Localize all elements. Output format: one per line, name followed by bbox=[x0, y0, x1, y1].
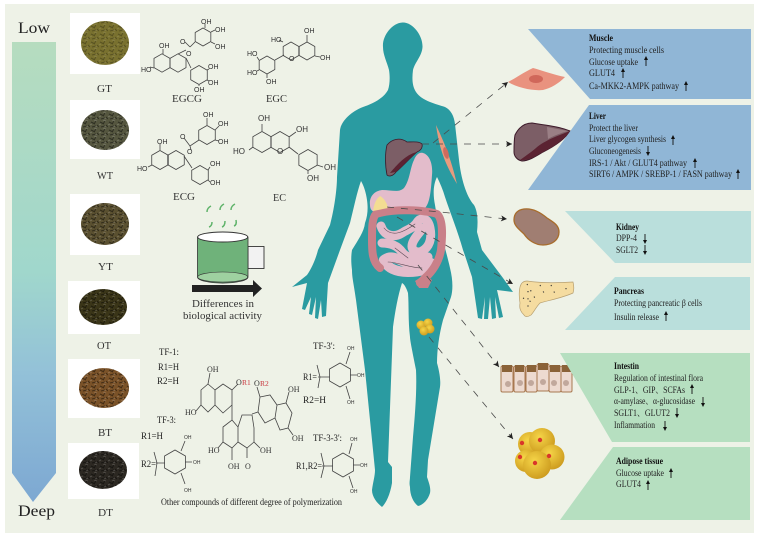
text and structure: TF-3': OH bbox=[347, 400, 355, 406]
icon: muscle cell bbox=[508, 68, 565, 90]
text and structure: TF-3': OH bbox=[357, 373, 365, 379]
molecule: EGC: HO bbox=[271, 37, 282, 44]
arrow: to adipose bbox=[429, 337, 513, 439]
panel: liver: IRS-1 / Akt / GLUT4 pathway bbox=[589, 158, 687, 168]
molecule: theaflavin core: HO bbox=[185, 408, 197, 417]
molecule: EC: OH bbox=[296, 125, 308, 134]
text and structure: TF-3-3': OH bbox=[350, 489, 358, 495]
panel: intestine: α-amylase、α-glucosidase bbox=[614, 396, 695, 406]
molecule: EGCG: O bbox=[186, 51, 192, 58]
tea sample: BT: BT bbox=[98, 428, 113, 439]
molecule: theaflavin core: R1 bbox=[242, 378, 251, 387]
icon: kidney bbox=[514, 209, 559, 245]
arrow: differences in biological activity bbox=[192, 280, 262, 297]
panel: muscle: Protecting muscle cells bbox=[589, 45, 664, 55]
molecule: EC: OH bbox=[307, 174, 319, 183]
text: differences in biological activity bbox=[183, 299, 263, 322]
molecule: EC: HO bbox=[233, 147, 245, 156]
text: polymerization caption: Other compounds of different degree of polymerization bbox=[161, 497, 342, 507]
panel: adipose tissue: Adipose tissue bbox=[616, 456, 663, 466]
panel: adipose tissue bbox=[560, 447, 750, 520]
panel: liver: SIRT6 / AMPK / SREBP-1 / FASN pathway bbox=[589, 169, 732, 179]
molecule: theaflavin core: OH bbox=[207, 365, 219, 374]
icon: adipose tissue bbox=[515, 428, 564, 479]
tea sample: DT: DT bbox=[98, 508, 114, 519]
panel: liver bbox=[528, 105, 751, 190]
molecule: ECG: OH bbox=[218, 121, 228, 128]
molecule: EGCG: OH bbox=[208, 80, 218, 87]
panel: intestine: Inflammation bbox=[614, 420, 655, 430]
text and structure: TF-3-3' bbox=[296, 433, 368, 495]
molecule: EC: OH bbox=[324, 163, 336, 172]
molecule: EGCG: HO bbox=[141, 67, 152, 74]
molecule: EGC bbox=[247, 28, 330, 105]
molecule: ECG: OH bbox=[203, 112, 214, 119]
molecule: EGC: O bbox=[289, 56, 295, 63]
icon: liver bbox=[514, 123, 570, 161]
panel: muscle: GLUT4 bbox=[589, 68, 615, 78]
panel: adipose tissue: Glucose uptake bbox=[616, 468, 664, 478]
text: differences in biological activity: Differences in bbox=[192, 299, 255, 310]
text: TF-1 bbox=[157, 347, 179, 386]
arrow: to muscle bbox=[433, 82, 508, 143]
organ: stomach bbox=[370, 153, 432, 214]
molecule: EGCG: EGCG bbox=[172, 94, 202, 105]
molecule: EC: O bbox=[277, 147, 283, 156]
arrow: to pancreas bbox=[397, 217, 513, 284]
molecule: EGC: HO bbox=[247, 70, 258, 77]
tea sample: GT bbox=[70, 13, 140, 95]
panel: muscle: Glucose uptake bbox=[589, 57, 638, 67]
tea sample: OT: OT bbox=[97, 341, 112, 352]
panel: kidney: DPP-4 bbox=[616, 233, 637, 243]
arrow: to intestine bbox=[418, 265, 499, 367]
tea samples column bbox=[68, 13, 140, 519]
text and structure: TF-3': R1= bbox=[303, 372, 317, 382]
tea sample: WT: WT bbox=[97, 171, 114, 182]
panel: intestine: Regulation of intestinal flora bbox=[614, 373, 703, 383]
molecule: theaflavin core: OH bbox=[292, 434, 304, 443]
molecule: theaflavin core: O bbox=[236, 378, 242, 387]
panel: pancreas: Pancreas bbox=[614, 286, 644, 296]
panel: kidney: SGLT2 bbox=[616, 245, 638, 255]
panel: pancreas: Insulin release bbox=[614, 312, 659, 322]
molecule: theaflavin core: HO bbox=[208, 446, 220, 455]
text and structure: TF-3-3': TF-3-3': bbox=[313, 433, 342, 443]
text and structure: TF-3: R2= bbox=[141, 459, 156, 469]
label: Deep: Deep bbox=[18, 503, 55, 520]
text: differences in biological activity: biological activity bbox=[183, 311, 263, 322]
organ: small intestine bbox=[381, 219, 431, 272]
panel: pancreas: Protecting pancreatic β cells bbox=[614, 298, 702, 308]
organ: small pancreas bbox=[373, 196, 388, 211]
panel: liver: Liver bbox=[589, 111, 606, 121]
text: TF-1: R2=H bbox=[157, 376, 179, 386]
molecule: EGCG bbox=[141, 19, 226, 105]
panel: adipose tissue: GLUT4 bbox=[616, 479, 641, 489]
molecule: EGCG: OH bbox=[159, 43, 170, 50]
molecule: ECG: O bbox=[180, 134, 186, 141]
text and structure: TF-3-3': OH bbox=[350, 437, 358, 443]
molecule: EGCG: O bbox=[180, 39, 186, 46]
icon: tea cup with steam bbox=[198, 204, 264, 283]
molecule: EGC: HO bbox=[247, 51, 258, 58]
molecule: theaflavin core: O bbox=[245, 462, 251, 471]
text: TF-1: R1=H bbox=[158, 362, 179, 372]
molecule: ECG: OH bbox=[157, 139, 168, 146]
panel: liver: Liver glycogen synthesis bbox=[589, 134, 666, 144]
tea sample: YT bbox=[70, 194, 140, 273]
text and structure: TF-3: OH bbox=[193, 460, 201, 466]
text and structure: TF-3: OH bbox=[184, 435, 192, 441]
molecule: theaflavin core: O bbox=[254, 379, 260, 388]
text and structure: TF-3': OH bbox=[347, 346, 355, 352]
tea sample: OT bbox=[68, 281, 140, 352]
molecule: EC: OH bbox=[258, 114, 270, 123]
molecule: EGC: OH bbox=[304, 28, 314, 35]
panel: muscle: Muscle bbox=[589, 33, 613, 43]
organ: small adipose bbox=[416, 318, 434, 336]
molecule: ECG: OH bbox=[210, 180, 220, 187]
text and structure: TF-3 bbox=[141, 415, 201, 494]
molecule: EGCG: OH bbox=[208, 64, 218, 71]
steam bbox=[207, 204, 236, 227]
panel: pancreas bbox=[565, 277, 750, 330]
panel: intestine: Intestin bbox=[614, 361, 639, 371]
molecule: EGCG: OH bbox=[201, 19, 212, 26]
text and structure: TF-3: R1=H bbox=[141, 431, 163, 441]
gradient arrow: fermentation degree bbox=[12, 20, 56, 520]
label: Low: Low bbox=[18, 20, 50, 37]
panel: muscle: Ca-MKK2-AMPK pathway bbox=[589, 81, 679, 91]
molecule: EGCG: OH bbox=[215, 44, 226, 51]
molecule: ECG: OH bbox=[210, 161, 220, 168]
molecule: theaflavin core: OH bbox=[228, 462, 240, 471]
text and structure: TF-3: OH bbox=[184, 488, 192, 494]
panel: liver: Protect the liver bbox=[589, 123, 638, 133]
text and structure: TF-3: TF-3: bbox=[157, 415, 176, 425]
panel: intestine bbox=[560, 353, 750, 442]
molecule: EC bbox=[233, 114, 336, 204]
molecule: EGCG: OH bbox=[194, 87, 204, 94]
molecule: EGCG: OH bbox=[215, 27, 226, 34]
panel: intestine: SGLT1、GLUT2 bbox=[614, 408, 670, 418]
organ: small liver bbox=[386, 139, 422, 176]
panel: liver: Gluconeogenesis bbox=[589, 146, 641, 156]
tea sample: GT: GT bbox=[97, 84, 113, 95]
tea sample: BT bbox=[68, 359, 140, 439]
organ: colon bbox=[372, 210, 442, 288]
molecule: EGC: OH bbox=[266, 79, 276, 86]
molecule: theaflavin core: OH bbox=[288, 385, 300, 394]
molecule: theaflavin core: R2 bbox=[260, 379, 269, 388]
molecule: ECG: O bbox=[187, 149, 193, 156]
tea sample: DT bbox=[68, 443, 139, 519]
molecule: EGC: OH bbox=[320, 55, 330, 62]
tea sample: YT: YT bbox=[98, 262, 114, 273]
tea sample: WT bbox=[70, 100, 140, 182]
panel: kidney bbox=[565, 211, 751, 263]
panel: muscle bbox=[528, 29, 751, 99]
text and structure: TF-3': R2=H bbox=[303, 395, 327, 405]
arrow: to liver bbox=[422, 143, 512, 145]
molecule: EC: EC bbox=[273, 193, 286, 204]
human body silhouette bbox=[292, 22, 513, 507]
molecule: ECG: ECG bbox=[173, 192, 195, 203]
molecule: ECG: HO bbox=[137, 166, 148, 173]
molecule: ECG: OH bbox=[218, 139, 228, 146]
icon: intestinal epithelial cells bbox=[501, 363, 572, 392]
molecule: EGC: EGC bbox=[266, 94, 287, 105]
text and structure: TF-3': TF-3': bbox=[313, 341, 335, 351]
arrow: to kidney bbox=[387, 207, 507, 219]
organ: muscle in arm bbox=[436, 125, 457, 184]
text and structure: TF-3-3': OH bbox=[360, 463, 368, 469]
text and structure: TF-3' bbox=[303, 341, 365, 406]
molecule: ECG bbox=[137, 112, 228, 203]
text: TF-1: TF-1: bbox=[159, 347, 179, 357]
panel: kidney: Kidney bbox=[616, 222, 639, 232]
icon: pancreas bbox=[519, 281, 574, 316]
text and structure: TF-3-3': R1,R2= bbox=[296, 461, 322, 471]
molecule: theaflavin core bbox=[185, 365, 304, 471]
molecule: theaflavin core: OH bbox=[260, 446, 272, 455]
dashed arrows from body organs to target organs bbox=[387, 82, 513, 439]
panel: intestine: GLP-1、GIP、SCFAs bbox=[614, 385, 685, 395]
